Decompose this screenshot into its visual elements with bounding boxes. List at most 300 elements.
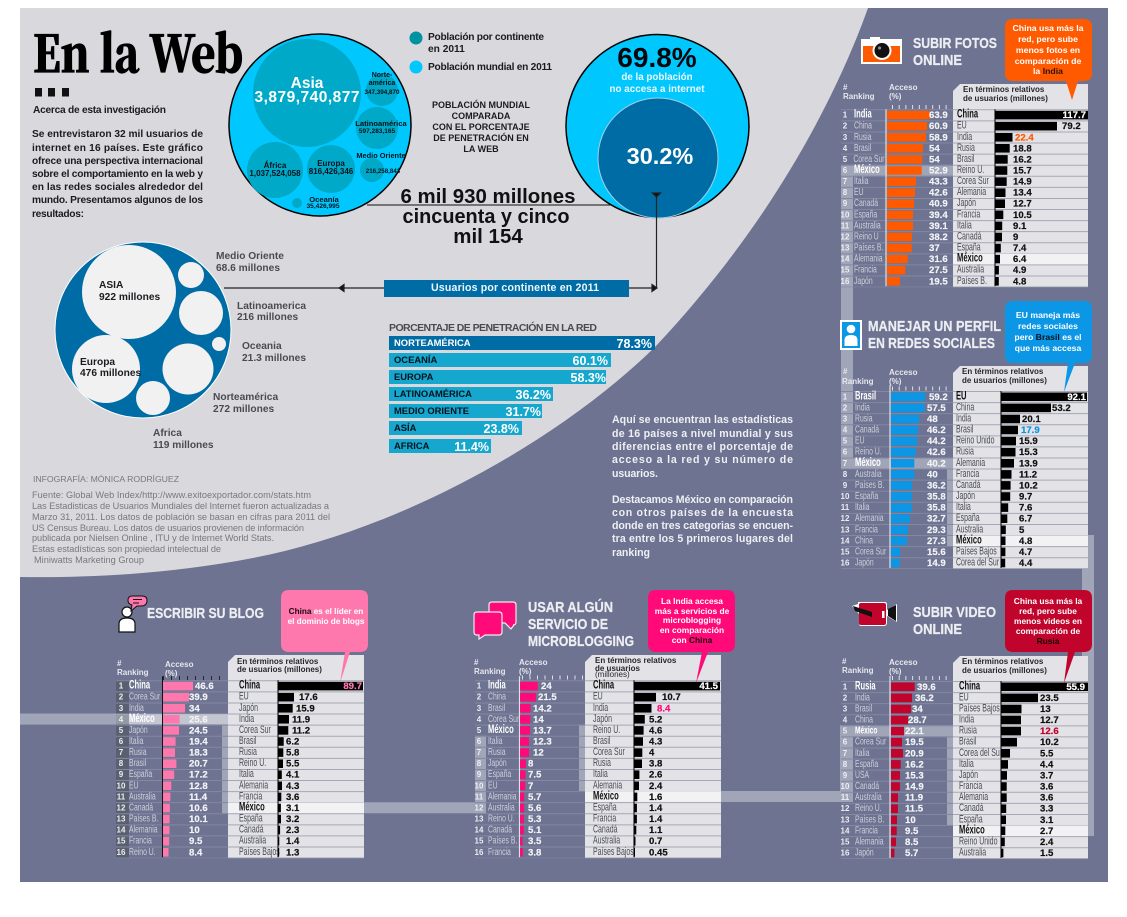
table rows: 54: [929, 154, 940, 165]
table rows: 5.5: [1040, 748, 1054, 759]
table rows: 8: [119, 759, 124, 768]
right header: En términos relativos: [595, 656, 677, 665]
table rows: Italia: [855, 746, 870, 758]
heading: USAR ALGÚN: [528, 598, 613, 616]
table rows: 14.2: [533, 703, 552, 714]
table rows: 12: [533, 748, 544, 759]
left headers: Ranking: [474, 667, 506, 676]
chart: world population bubbles: 597,283,165: [359, 128, 395, 135]
table rows: 6.7: [1019, 514, 1032, 525]
table rows: 15.3: [1019, 447, 1038, 458]
chart: penetration percentages: 36.2%: [516, 388, 551, 402]
table rows: 16.2: [1013, 154, 1032, 165]
table rows: Italia: [593, 768, 608, 780]
table rows: 11: [841, 793, 850, 802]
table rows: 11: [475, 792, 484, 801]
table rows: 10: [841, 210, 850, 219]
table rows: Japón: [593, 712, 612, 724]
table rows: 15.3: [905, 770, 924, 781]
table rows: 4: [119, 715, 124, 724]
table rows: Canadá: [129, 801, 153, 813]
table rows: 10: [189, 825, 200, 836]
table rows: 38.2: [929, 232, 948, 243]
explanatory text: tra entre los 5 primeros lugares del: [612, 533, 793, 545]
panel: manejar un perfil: [840, 301, 1092, 569]
table rows: 5.1: [528, 825, 542, 836]
table rows: Alemania: [855, 835, 884, 847]
table rows: 10: [841, 782, 850, 791]
table rows: India: [956, 412, 971, 424]
chart: users bubbles: [55, 242, 231, 418]
table rows: 13: [841, 525, 850, 534]
table rows: 19.5: [929, 276, 948, 287]
table rows: 22.1: [905, 726, 924, 737]
legend: [410, 32, 552, 74]
table rows: 10.7: [662, 692, 681, 703]
table rows: Canadá: [855, 423, 879, 435]
heading: SUBIR VIDEO: [913, 604, 996, 621]
table rows: 34: [912, 704, 923, 715]
legend: en 2011: [428, 44, 465, 55]
table rows: Países B.: [957, 274, 987, 286]
table rows: Francia: [956, 467, 979, 479]
table rows: 42.6: [927, 447, 946, 458]
table rows: 79.2: [1062, 121, 1081, 132]
table rows: Rusia: [959, 724, 977, 736]
table rows: 6.4: [1013, 254, 1027, 265]
chart: penetration percentages: [389, 321, 655, 454]
table rows: 4.6: [649, 725, 662, 736]
table rows: 2: [843, 693, 848, 702]
chart: users bubbles: 922 millones: [99, 292, 160, 303]
left headers: Acceso: [889, 368, 918, 377]
table rows: 9: [119, 770, 124, 779]
table rows: 41.5: [699, 681, 719, 692]
table rows: 4: [843, 144, 848, 153]
table rows: 5: [477, 726, 482, 735]
comparison caption: COMPARADA: [452, 111, 511, 121]
chart: penetration percentages: PORCENTAJE DE PENETRACIÓN EN LA RED: [389, 321, 597, 334]
table rows: Brasil: [855, 702, 872, 714]
table rows: 12: [117, 803, 126, 812]
left headers: Ranking: [117, 668, 149, 677]
intro text: Se entrevistaron 32 mil usuarios de: [32, 129, 203, 140]
table rows: Brasil: [855, 390, 876, 403]
panel: subir video: [841, 590, 1092, 859]
table rows: 18.8: [1013, 143, 1032, 154]
table rows: Corea Sur: [129, 690, 160, 702]
chart: world population bubbles: 816,426,346: [309, 167, 354, 176]
table rows: 8.4: [657, 703, 671, 714]
table rows: 3.8: [649, 759, 663, 770]
right header: de usuarios: [595, 664, 640, 673]
table rows: 14: [841, 255, 850, 264]
table rows: India: [854, 108, 872, 121]
legend: Población mundial en 2011: [428, 62, 552, 73]
chart: world population bubbles: África: [264, 161, 287, 170]
table rows: México: [957, 252, 983, 265]
callout: que más accesa: [1015, 343, 1081, 353]
table rows: México: [956, 534, 982, 547]
table rows: 2.4: [1040, 837, 1054, 848]
left headers: #: [843, 83, 848, 92]
table rows: Japón: [855, 556, 874, 568]
table rows: 11.9: [905, 793, 923, 804]
table rows: 11.4: [189, 792, 208, 803]
table rows: Australia: [854, 219, 881, 231]
table rows: India: [959, 713, 974, 725]
explanatory text: ranking: [612, 547, 650, 559]
table rows: Japón: [488, 757, 507, 769]
table rows: Rusia: [129, 746, 147, 757]
intro text: internet en 16 países. Este gráfico: [32, 143, 203, 154]
table rows: Francia: [593, 812, 616, 824]
table rows: EU: [956, 390, 967, 403]
table rows: México: [593, 790, 619, 803]
table rows: 1: [477, 682, 482, 691]
table rows: 2: [119, 693, 124, 702]
left headers: (%): [889, 667, 902, 676]
chart: users bubbles: 476 millones: [80, 368, 141, 379]
callout: China usa más la: [1013, 23, 1084, 33]
right header: [963, 85, 1048, 103]
table rows: 19.5: [905, 737, 924, 748]
table rows: 12.6: [1040, 726, 1059, 737]
table rows: Brasil: [129, 757, 146, 769]
table rows: 6: [843, 448, 848, 457]
credits: Estas estadísticas son propiedad intelectual de: [32, 544, 221, 554]
table rows: 13: [1040, 704, 1051, 715]
chart: penetration percentages: 23.8%: [484, 422, 519, 436]
table rows: 12: [475, 803, 484, 812]
subtitle: Acerca de esta investigación: [33, 105, 166, 116]
table rows: China: [855, 713, 873, 725]
table rows: 8: [843, 470, 848, 479]
table rows: Alemania: [957, 186, 986, 198]
table rows: 7: [843, 177, 848, 186]
table rows: 14.9: [1013, 177, 1032, 188]
table rows: 8.4: [189, 847, 203, 858]
table rows: 35.8: [927, 503, 946, 514]
table rows: Francia: [239, 790, 262, 802]
table rows: Reino Unido: [956, 434, 994, 446]
total population figure: mil 154: [453, 225, 523, 248]
table rows: Alemania: [956, 456, 985, 468]
table rows: 19.4: [189, 736, 208, 747]
table rows: 16: [841, 848, 850, 858]
chart: world population bubbles: Oceanía: [309, 195, 340, 204]
table rows: Alemania: [488, 790, 517, 802]
table rows: 11.5: [905, 804, 924, 815]
table rows: 13: [841, 815, 850, 824]
users labels: 21.3 millones: [242, 353, 306, 364]
table rows: 39.6: [917, 682, 936, 693]
table rows: 13: [117, 815, 126, 824]
table rows: España: [855, 490, 878, 501]
table rows: 4: [649, 748, 655, 759]
icon: camera: [861, 37, 902, 64]
table rows: 7: [477, 748, 482, 757]
table rows: 11.9: [292, 714, 310, 725]
table rows: 34: [189, 703, 200, 714]
chart: world population bubbles: Europa: [317, 159, 345, 168]
left headers: Acceso: [519, 658, 548, 667]
table rows: [841, 676, 1088, 859]
explanatory text: [612, 414, 793, 559]
callout: [281, 590, 368, 683]
table rows: 3.2: [286, 814, 299, 825]
table rows: Italia: [855, 501, 870, 512]
right header: En términos relativos: [237, 657, 319, 666]
table rows: EU: [855, 434, 865, 446]
table rows: 3.3: [1040, 804, 1053, 815]
heading: MICROBLOGGING: [528, 633, 634, 650]
table rows: 5: [843, 727, 848, 736]
table rows: 13: [475, 815, 484, 824]
table rows: Rusia: [855, 680, 876, 693]
table rows: India: [855, 691, 870, 703]
right header: [962, 367, 1047, 385]
table rows: 5.7: [528, 792, 541, 803]
explanatory text: diferencias entre el porcentaje de: [612, 441, 793, 453]
table rows: China: [239, 679, 261, 692]
chart: world population bubbles: Medio Oriente: [356, 151, 406, 160]
right panel background: [953, 366, 1088, 568]
users labels: Latinoamerica: [237, 301, 306, 312]
table rows: Canadá: [957, 230, 981, 242]
chart: internet access circle: no accesa a internet: [610, 84, 705, 95]
table rows: 4.1: [286, 770, 300, 781]
users labels: 119 millones: [153, 440, 214, 451]
left headers: [842, 657, 950, 678]
table rows: Francia: [854, 263, 877, 275]
table rows: 10.6: [189, 803, 208, 814]
table rows: 3: [843, 704, 848, 714]
right header: de usuarios (millones): [963, 94, 1048, 103]
table rows: 15: [841, 837, 850, 846]
table rows: Países Bajos: [956, 545, 997, 557]
table rows: España: [129, 768, 152, 780]
table rows: Brasil: [959, 735, 976, 747]
table rows: 3.1: [286, 803, 300, 814]
total population figure: 6 mil 930 millones: [400, 185, 576, 208]
table rows: Canadá: [855, 780, 879, 791]
table rows: 9.5: [905, 826, 919, 837]
table rows: 2: [843, 122, 848, 131]
total population figure: [400, 185, 576, 248]
chart: world population bubbles: 35,426,995: [306, 203, 340, 210]
table rows: 2: [843, 403, 848, 412]
table rows: India: [957, 130, 972, 142]
table rows: Reino U: [854, 230, 879, 242]
callout: red, pero sube: [1018, 34, 1078, 44]
table rows: 17.2: [189, 770, 208, 781]
right panel background: [953, 656, 1088, 858]
table rows: Australia: [957, 263, 984, 275]
table rows: 0.45: [649, 847, 668, 858]
table rows: EU: [959, 691, 969, 703]
table rows: 24.5: [189, 725, 208, 736]
table rows: 10: [117, 781, 126, 790]
table rows: Canadá: [593, 823, 617, 835]
table rows: 35.8: [927, 492, 946, 502]
table rows: 15.7: [1013, 166, 1032, 176]
panel: microblogging: [474, 590, 735, 858]
table rows: 0.7: [649, 836, 662, 847]
right header: En términos relativos: [962, 657, 1044, 666]
table rows: 4.9: [1013, 265, 1026, 276]
table rows: 89.7: [343, 681, 362, 692]
callout: [1005, 301, 1092, 392]
table rows: Italia: [129, 735, 144, 746]
table rows: Australia: [129, 790, 156, 802]
table rows: 1: [843, 682, 848, 691]
table rows: 20.1: [1022, 414, 1041, 425]
table rows: 58.9: [929, 132, 948, 143]
table rows: 17.9: [1021, 425, 1040, 436]
chart: penetration percentages: 58.3%: [571, 371, 606, 385]
table rows: 14: [117, 826, 126, 835]
chart: internet access circle: 30.2%: [627, 143, 693, 169]
table rows: 3: [843, 414, 848, 424]
chart: world population bubbles: 1,037,524,058: [249, 169, 301, 178]
table rows: 5.8: [286, 748, 300, 759]
legend: Población por continente: [428, 32, 544, 43]
table rows: 1: [843, 111, 848, 120]
table rows: India: [239, 712, 254, 724]
chart: penetration percentages: NORTEAMÉRICA: [394, 337, 471, 348]
table rows: 27.5: [929, 265, 948, 276]
users labels: Norteamérica: [213, 392, 278, 403]
table rows: Rusia: [956, 445, 974, 457]
table rows: 20.9: [905, 748, 924, 759]
users labels: Oceania: [242, 341, 282, 352]
callout: La India accesa: [661, 596, 723, 606]
table rows: Francia: [957, 208, 980, 220]
table rows: Países B.: [854, 241, 883, 253]
table rows: 3.6: [1040, 782, 1053, 792]
credits: Miniwatts Marketing Group: [34, 555, 144, 565]
callout: comparación de: [1015, 56, 1081, 66]
table rows: 6: [477, 737, 482, 746]
table rows: Alemania: [239, 779, 268, 791]
table rows: 15.6: [927, 547, 946, 558]
chart: world population bubbles: [229, 34, 411, 216]
table rows: 1.4: [649, 814, 663, 825]
table rows: 25.6: [189, 714, 208, 725]
table rows: 3: [119, 704, 124, 713]
callout: EU maneja más: [1016, 310, 1080, 320]
table rows: 15: [117, 837, 126, 846]
table rows: 9.7: [1019, 492, 1032, 502]
table rows: 7: [119, 748, 124, 757]
chart: world population bubbles: Latinoamérica: [355, 119, 408, 128]
table rows: 5.2: [649, 714, 662, 725]
callout: con China: [672, 635, 713, 645]
table rows: Países Bajos: [959, 702, 1000, 714]
table rows: [841, 385, 1088, 569]
table rows: 11.2: [1019, 469, 1037, 480]
table rows: Rusia: [239, 746, 257, 757]
table rows: 57.5: [927, 403, 946, 414]
table rows: México: [488, 723, 514, 736]
table rows: 4: [843, 426, 848, 434]
heading: SERVICIO DE: [528, 616, 608, 633]
table rows: 8: [528, 759, 534, 770]
table rows: Italia: [854, 175, 869, 186]
table rows: 6: [119, 737, 124, 746]
table rows: Italia: [959, 757, 974, 769]
table rows: Brasil: [488, 701, 505, 713]
right header: En términos relativos: [962, 367, 1044, 376]
table rows: 52.9: [929, 166, 948, 176]
table rows: Francia: [488, 845, 511, 857]
table rows: 10.2: [1040, 737, 1059, 748]
right header: [962, 657, 1047, 675]
table rows: 3: [477, 704, 482, 713]
table rows: 36.2: [915, 693, 934, 704]
table rows: México: [854, 164, 880, 177]
table rows: 16: [841, 558, 850, 568]
table rows: Japón: [239, 701, 258, 713]
table rows: 20.7: [189, 759, 208, 770]
table rows: Francia: [129, 834, 152, 846]
table rows: India: [855, 401, 870, 413]
table rows: Brasil: [956, 423, 973, 435]
table rows: España: [855, 757, 878, 769]
table rows: India: [593, 701, 608, 713]
chart: internet access circle: 69.8%: [617, 42, 697, 73]
table rows: China: [956, 401, 974, 413]
table rows: Australia: [959, 846, 986, 858]
chart: world population bubbles: 347,394,870: [364, 89, 400, 96]
table rows: India: [129, 701, 144, 713]
users labels: 272 millones: [213, 404, 274, 415]
users labels: [153, 251, 306, 451]
table rows: 1: [843, 392, 848, 401]
table rows: 14: [841, 536, 850, 545]
table rows: 117.7: [1063, 110, 1086, 121]
table rows: 15: [841, 547, 850, 556]
table rows: 4.3: [649, 736, 662, 747]
table rows: Reino U.: [488, 812, 515, 824]
table rows: EU: [957, 119, 967, 131]
intro text: resultados:: [32, 209, 84, 220]
left headers: #: [842, 657, 847, 666]
chart: world population bubbles: 216,258,843: [366, 168, 401, 175]
table rows: 7: [843, 749, 848, 758]
table rows: Corea Sur: [957, 175, 989, 186]
icon: speech bubbles: [474, 602, 516, 639]
chart: penetration percentages: ASÍA: [394, 422, 417, 433]
table rows: 32.7: [927, 514, 946, 525]
table rows: 48: [927, 414, 938, 425]
intro text: sobre el comportamiento en la web y: [32, 169, 203, 180]
table rows: 17.6: [299, 692, 318, 703]
table rows: España: [593, 801, 617, 813]
chart: penetration percentages: 60.1%: [573, 354, 608, 368]
table rows: India: [488, 679, 506, 692]
table rows: Australia: [593, 834, 620, 846]
table rows: 5: [843, 437, 848, 446]
callout: [648, 590, 735, 683]
explanatory text: de 16 países a nivel mundial y sus: [612, 428, 793, 440]
total population figure: cincuenta y cinco: [402, 205, 570, 228]
left headers: (%): [165, 669, 178, 678]
table rows: 40: [927, 469, 938, 480]
table rows: [475, 676, 721, 858]
table rows: 16: [117, 848, 126, 857]
